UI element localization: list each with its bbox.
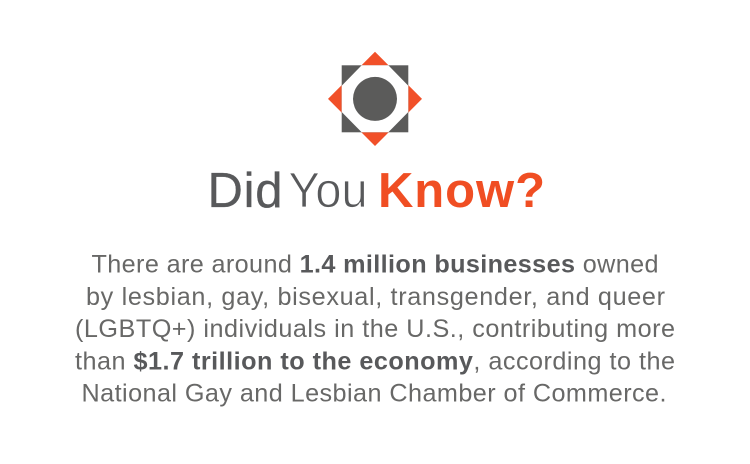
body text block: [75, 250, 675, 408]
body text block: There are around 1.4 million businesses owned: [92, 250, 658, 278]
body text block: than $1.7 trillion to the economy, according to the: [75, 347, 675, 375]
body text block: by lesbian, gay, bisexual, transgender, and queer: [86, 283, 665, 311]
body text block: (LGBTQ+) individuals in the U.S., contributing more: [75, 315, 675, 343]
heading: Did You Know?: Did: [208, 164, 282, 218]
icon: did you know emblem: [328, 52, 422, 146]
heading: Did You Know?: You: [288, 164, 368, 218]
heading: Did You Know?: [208, 164, 545, 218]
body text block: National Gay and Lesbian Chamber of Commerce.: [82, 380, 666, 408]
heading: Did You Know?: Know?: [378, 164, 545, 218]
